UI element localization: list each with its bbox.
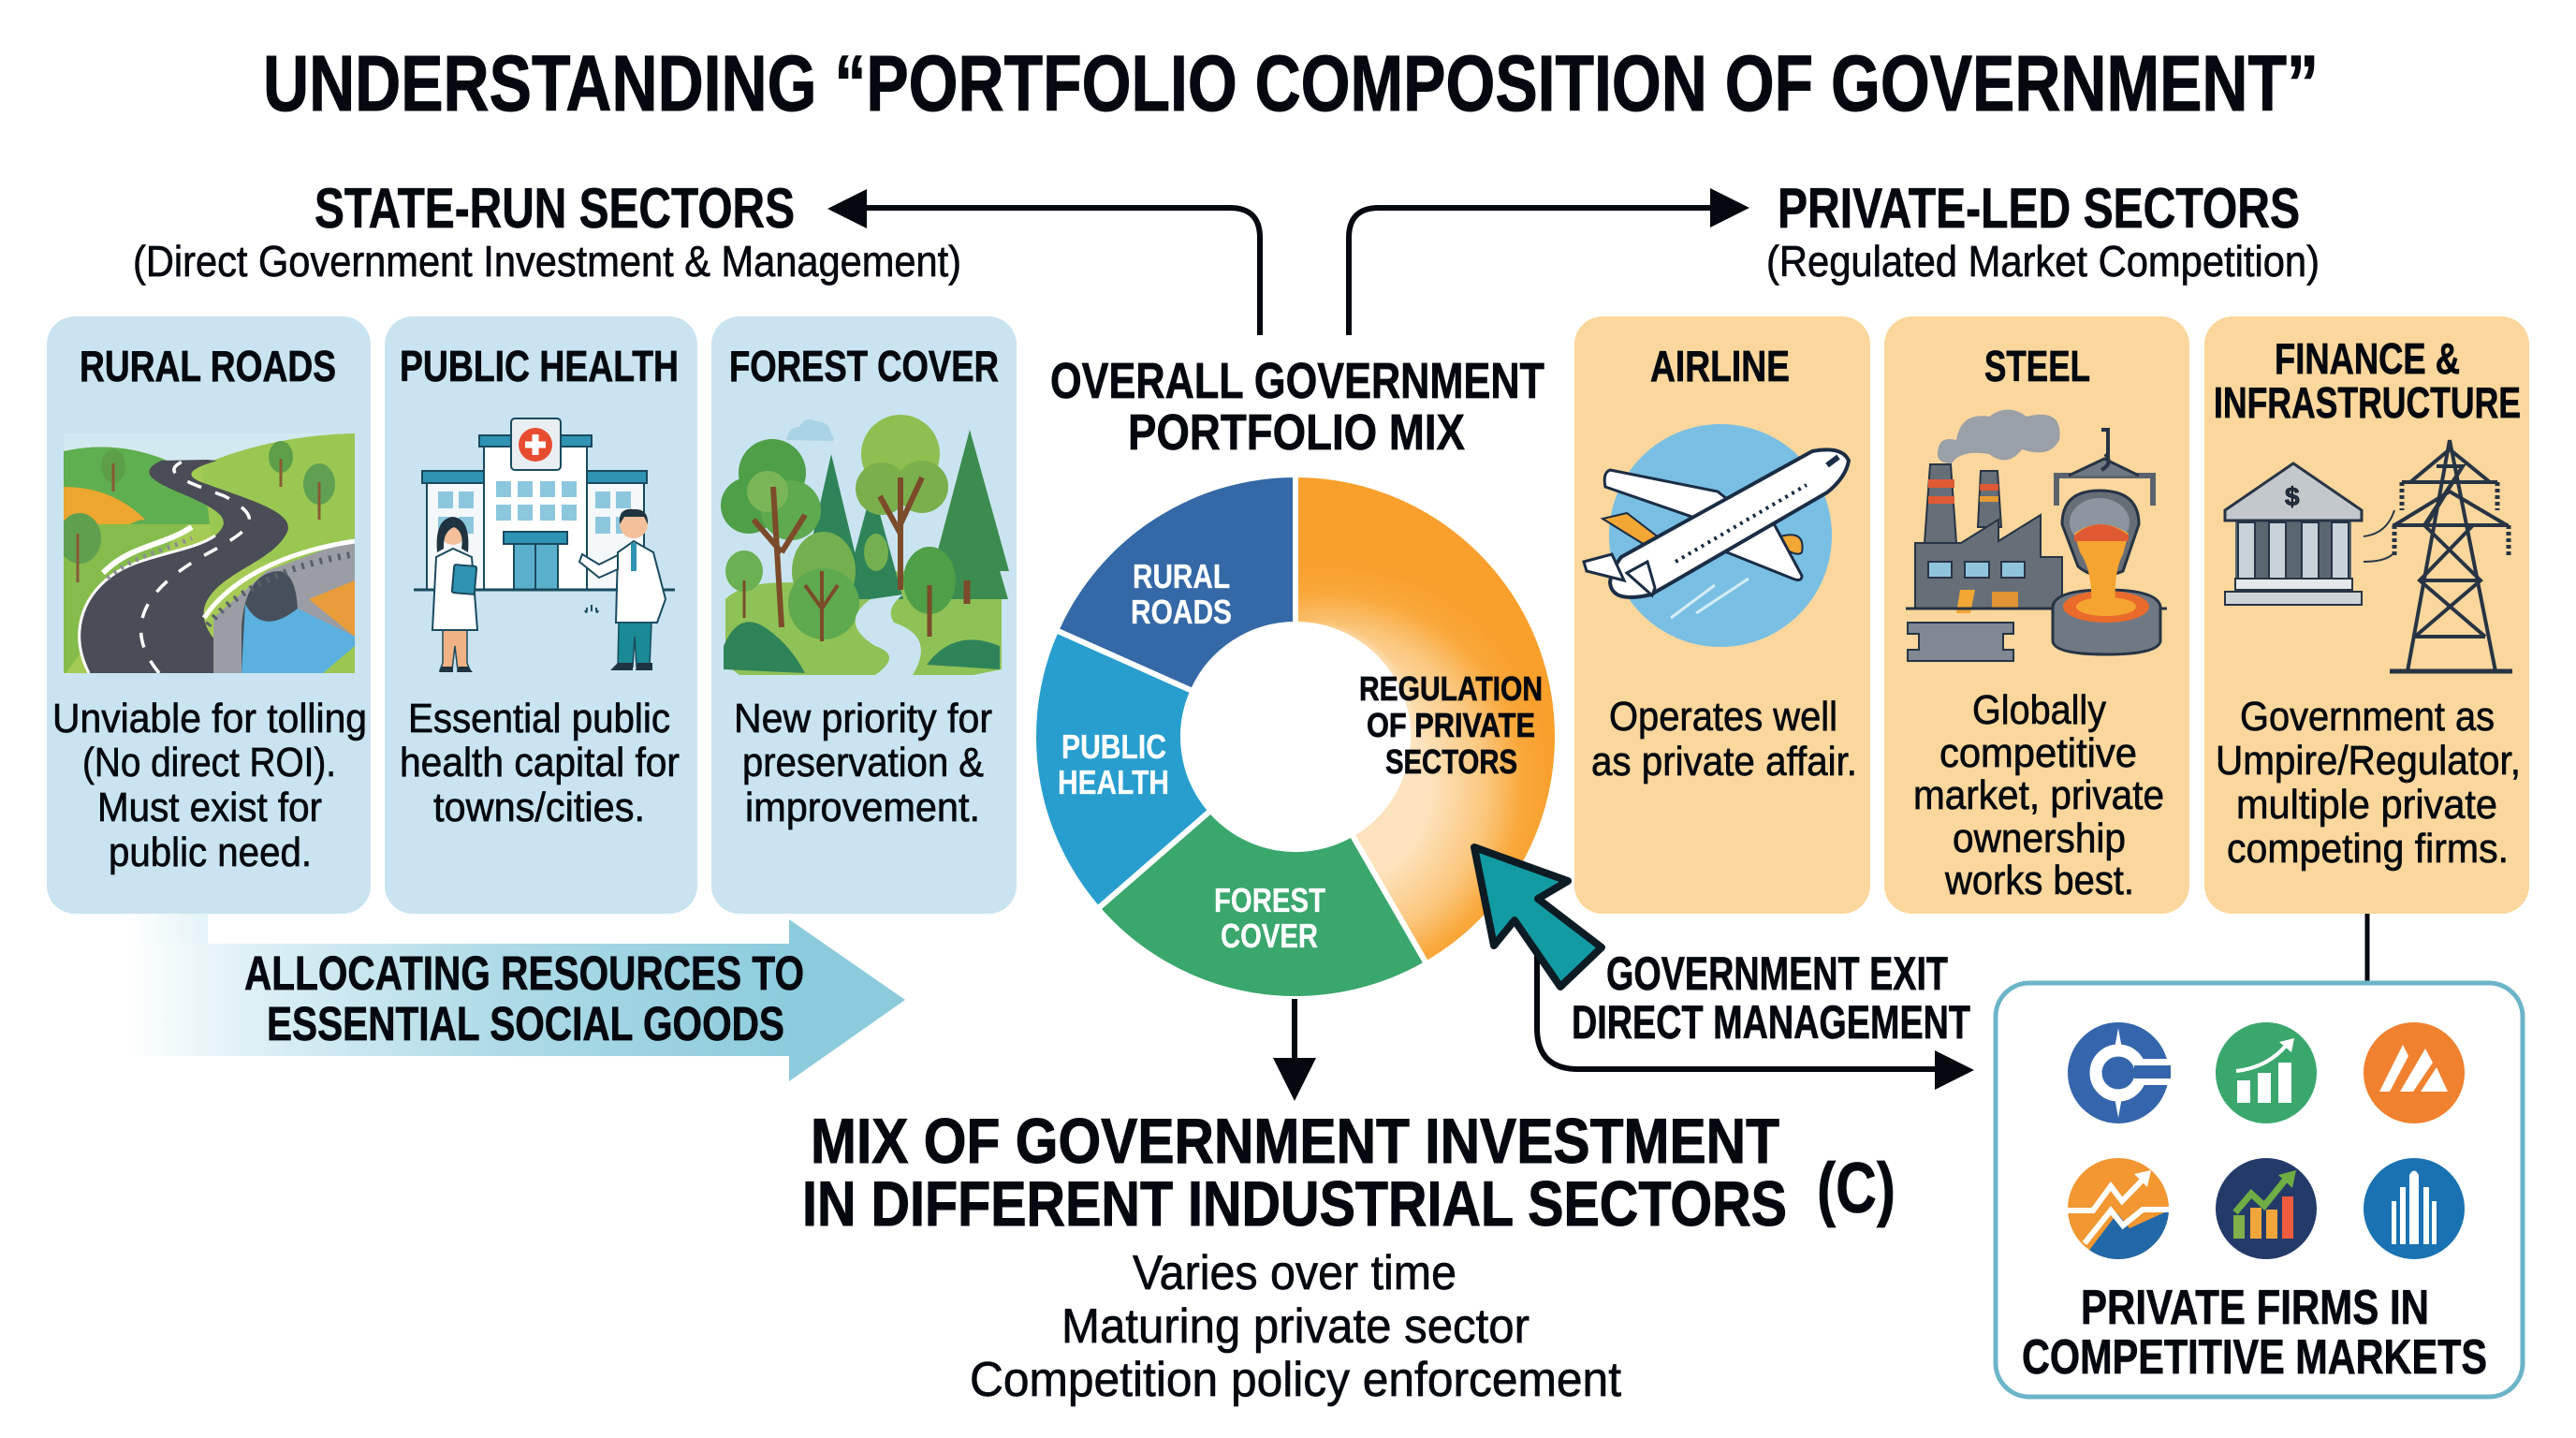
- label: rural roads: [1131, 557, 1232, 631]
- panel: rural roads: RURAL ROADS: [80, 342, 336, 390]
- panel: steel: ownership: [1953, 815, 2126, 861]
- panel: public health: towns/cities.: [433, 785, 645, 830]
- panel: rural roads: public need.: [109, 829, 312, 875]
- label: regulation of private sectors: SECTORS: [1385, 742, 1517, 781]
- woman doctor: [440, 630, 470, 670]
- panel: steel: works best.: [1944, 858, 2134, 903]
- heading: mix of government investment: [802, 1106, 1895, 1240]
- label: rural roads: ROADS: [1131, 593, 1232, 631]
- segment: public health: [1033, 630, 1210, 909]
- text block: mix notes: Varies over time: [1133, 1246, 1456, 1300]
- panel: forest cover: FOREST COVER: [729, 342, 999, 390]
- heading: mix of government investment: MIX OF GOVERNMENT INVESTMENT: [811, 1106, 1779, 1177]
- panel: forest cover: [711, 316, 1017, 914]
- logo: orange peaks: [2364, 1022, 2465, 1123]
- panel: finance and infrastructure: [2204, 316, 2529, 914]
- segment: forest cover: [1098, 811, 1427, 999]
- heading: overall government portfolio mix: OVERALL GOVERNMENT: [1050, 353, 1544, 409]
- heading: mix of government investment: IN DIFFERENT INDUSTRIAL SECTORS: [802, 1168, 1787, 1240]
- label: government exit direct management: DIRECT MANAGEMENT: [1572, 996, 1970, 1049]
- logo: orange and blue trend: [2068, 1158, 2169, 1259]
- icon: airplane: [1584, 424, 1849, 647]
- heading: state-run sectors: (Direct Government Investment & Management): [133, 237, 961, 286]
- panel: public health: PUBLIC HEALTH: [400, 342, 679, 390]
- arrow: to private-led sectors: [1349, 188, 1749, 335]
- label: forest cover: [1214, 881, 1325, 955]
- panel: public health: Essential public: [408, 696, 670, 741]
- icon: bank and pylon: [2225, 440, 2512, 671]
- panel: forest cover: preservation &: [742, 740, 984, 785]
- label: government exit direct management: GOVERNMENT EXIT: [1606, 947, 1948, 1000]
- heading: private-led sectors: (Regulated Market Competition): [1766, 237, 2320, 286]
- panel: steel: STEEL: [1984, 342, 2090, 390]
- panel: rural roads: [47, 316, 371, 914]
- arrow: allocating resources banner: ALLOCATING RESOURCES TO: [244, 946, 804, 1000]
- panel: airline: as private affair.: [1591, 739, 1857, 785]
- panel: finance and infrastructure: competing firms.: [2227, 826, 2509, 872]
- logo: green bar chart: [2216, 1022, 2317, 1123]
- label: regulation of private sectors: [1359, 669, 1543, 781]
- arrow: allocating resources banner: [125, 914, 905, 1081]
- panel: public health: [385, 316, 697, 914]
- icon: forest: [721, 415, 1009, 675]
- icon: hospital with doctors: [414, 418, 675, 672]
- panel: forest cover: New priority for: [734, 696, 992, 741]
- panel: rural roads: Unviable for tolling: [52, 696, 367, 741]
- arrow: donut down to mix heading: [1273, 999, 1316, 1101]
- text block: mix notes: Competition policy enforcement: [970, 1353, 1622, 1407]
- panel: steel: Globally: [1972, 687, 2106, 733]
- heading: overall government portfolio mix: PORTFOLIO MIX: [1128, 404, 1465, 461]
- label: forest cover: FOREST: [1214, 881, 1325, 919]
- connector: finance panel to private firms: [2364, 914, 2370, 983]
- label: rural roads: RURAL: [1133, 557, 1230, 595]
- icon: bank and pylon: $: [2285, 482, 2300, 511]
- arrow: allocating resources banner: ESSENTIAL SOCIAL GOODS: [267, 997, 784, 1050]
- segment: rural roads: [1056, 475, 1295, 691]
- heading: private-led sectors: [1766, 177, 2320, 286]
- logo: blue skyline: [2364, 1158, 2465, 1259]
- heading: state-run sectors: [133, 177, 961, 286]
- panel: airline: AIRLINE: [1650, 342, 1790, 390]
- arrow: teal government exit arrow: [1474, 847, 1602, 987]
- panel: airline: Operates well: [1609, 694, 1837, 740]
- panel: steel: market, private: [1913, 772, 2164, 818]
- arrow: government exit line to private firms: [1537, 950, 1974, 1090]
- panel: steel: competitive: [1939, 730, 2137, 776]
- heading: overall government portfolio mix: [1050, 353, 1544, 461]
- text block: mix notes: Maturing private sector: [1061, 1299, 1530, 1354]
- panel: finance and infrastructure: Umpire/Regulator,: [2216, 738, 2521, 784]
- male doctor: [620, 510, 648, 538]
- label: public health: HEALTH: [1058, 763, 1169, 801]
- panel: airline: [1574, 316, 1870, 914]
- panel: private firms in competitive markets: PRIVATE FIRMS IN: [2081, 1281, 2429, 1335]
- label: forest cover: COVER: [1221, 917, 1318, 955]
- arrow: to state-run sectors: [827, 189, 1260, 335]
- label: government exit direct management: [1572, 947, 1970, 1049]
- logo: navy growth chart: [2216, 1158, 2317, 1259]
- heading: state-run sectors: STATE-RUN SECTORS: [315, 177, 795, 240]
- label: public health: PUBLIC: [1061, 727, 1166, 766]
- label: public health: [1058, 727, 1169, 801]
- label: regulation of private sectors: OF PRIVATE: [1367, 706, 1535, 744]
- panel: finance and infrastructure: Government as: [2240, 694, 2495, 740]
- heading: private-led sectors: PRIVATE-LED SECTORS: [1778, 177, 2300, 240]
- panel: private firms in competitive markets: [1996, 983, 2523, 1397]
- panel: rural roads: (No direct ROI).: [82, 740, 336, 785]
- icon: winding road and bridge: [58, 433, 355, 673]
- text block: mix notes: [970, 1246, 1622, 1407]
- panel: rural roads: Must exist for: [97, 785, 322, 830]
- highlight: soft white glow: [1206, 621, 1415, 830]
- panel: finance and infrastructure: FINANCE &: [2275, 334, 2460, 383]
- panel: finance and infrastructure: multiple private: [2236, 782, 2497, 828]
- heading: mix of government investment: (C): [1817, 1149, 1895, 1228]
- panel: forest cover: improvement.: [745, 785, 980, 830]
- logo: blue C: [2068, 1022, 2171, 1123]
- label: regulation of private sectors: REGULATION: [1359, 669, 1543, 708]
- icon: factory and molten steel ladle: [1906, 410, 2167, 661]
- donut chart: portfolio mix: [1033, 475, 1558, 999]
- segment: regulation of private sectors: [1295, 475, 1558, 964]
- panel: steel: [1884, 316, 2189, 914]
- panel: public health: health capital for: [400, 740, 680, 785]
